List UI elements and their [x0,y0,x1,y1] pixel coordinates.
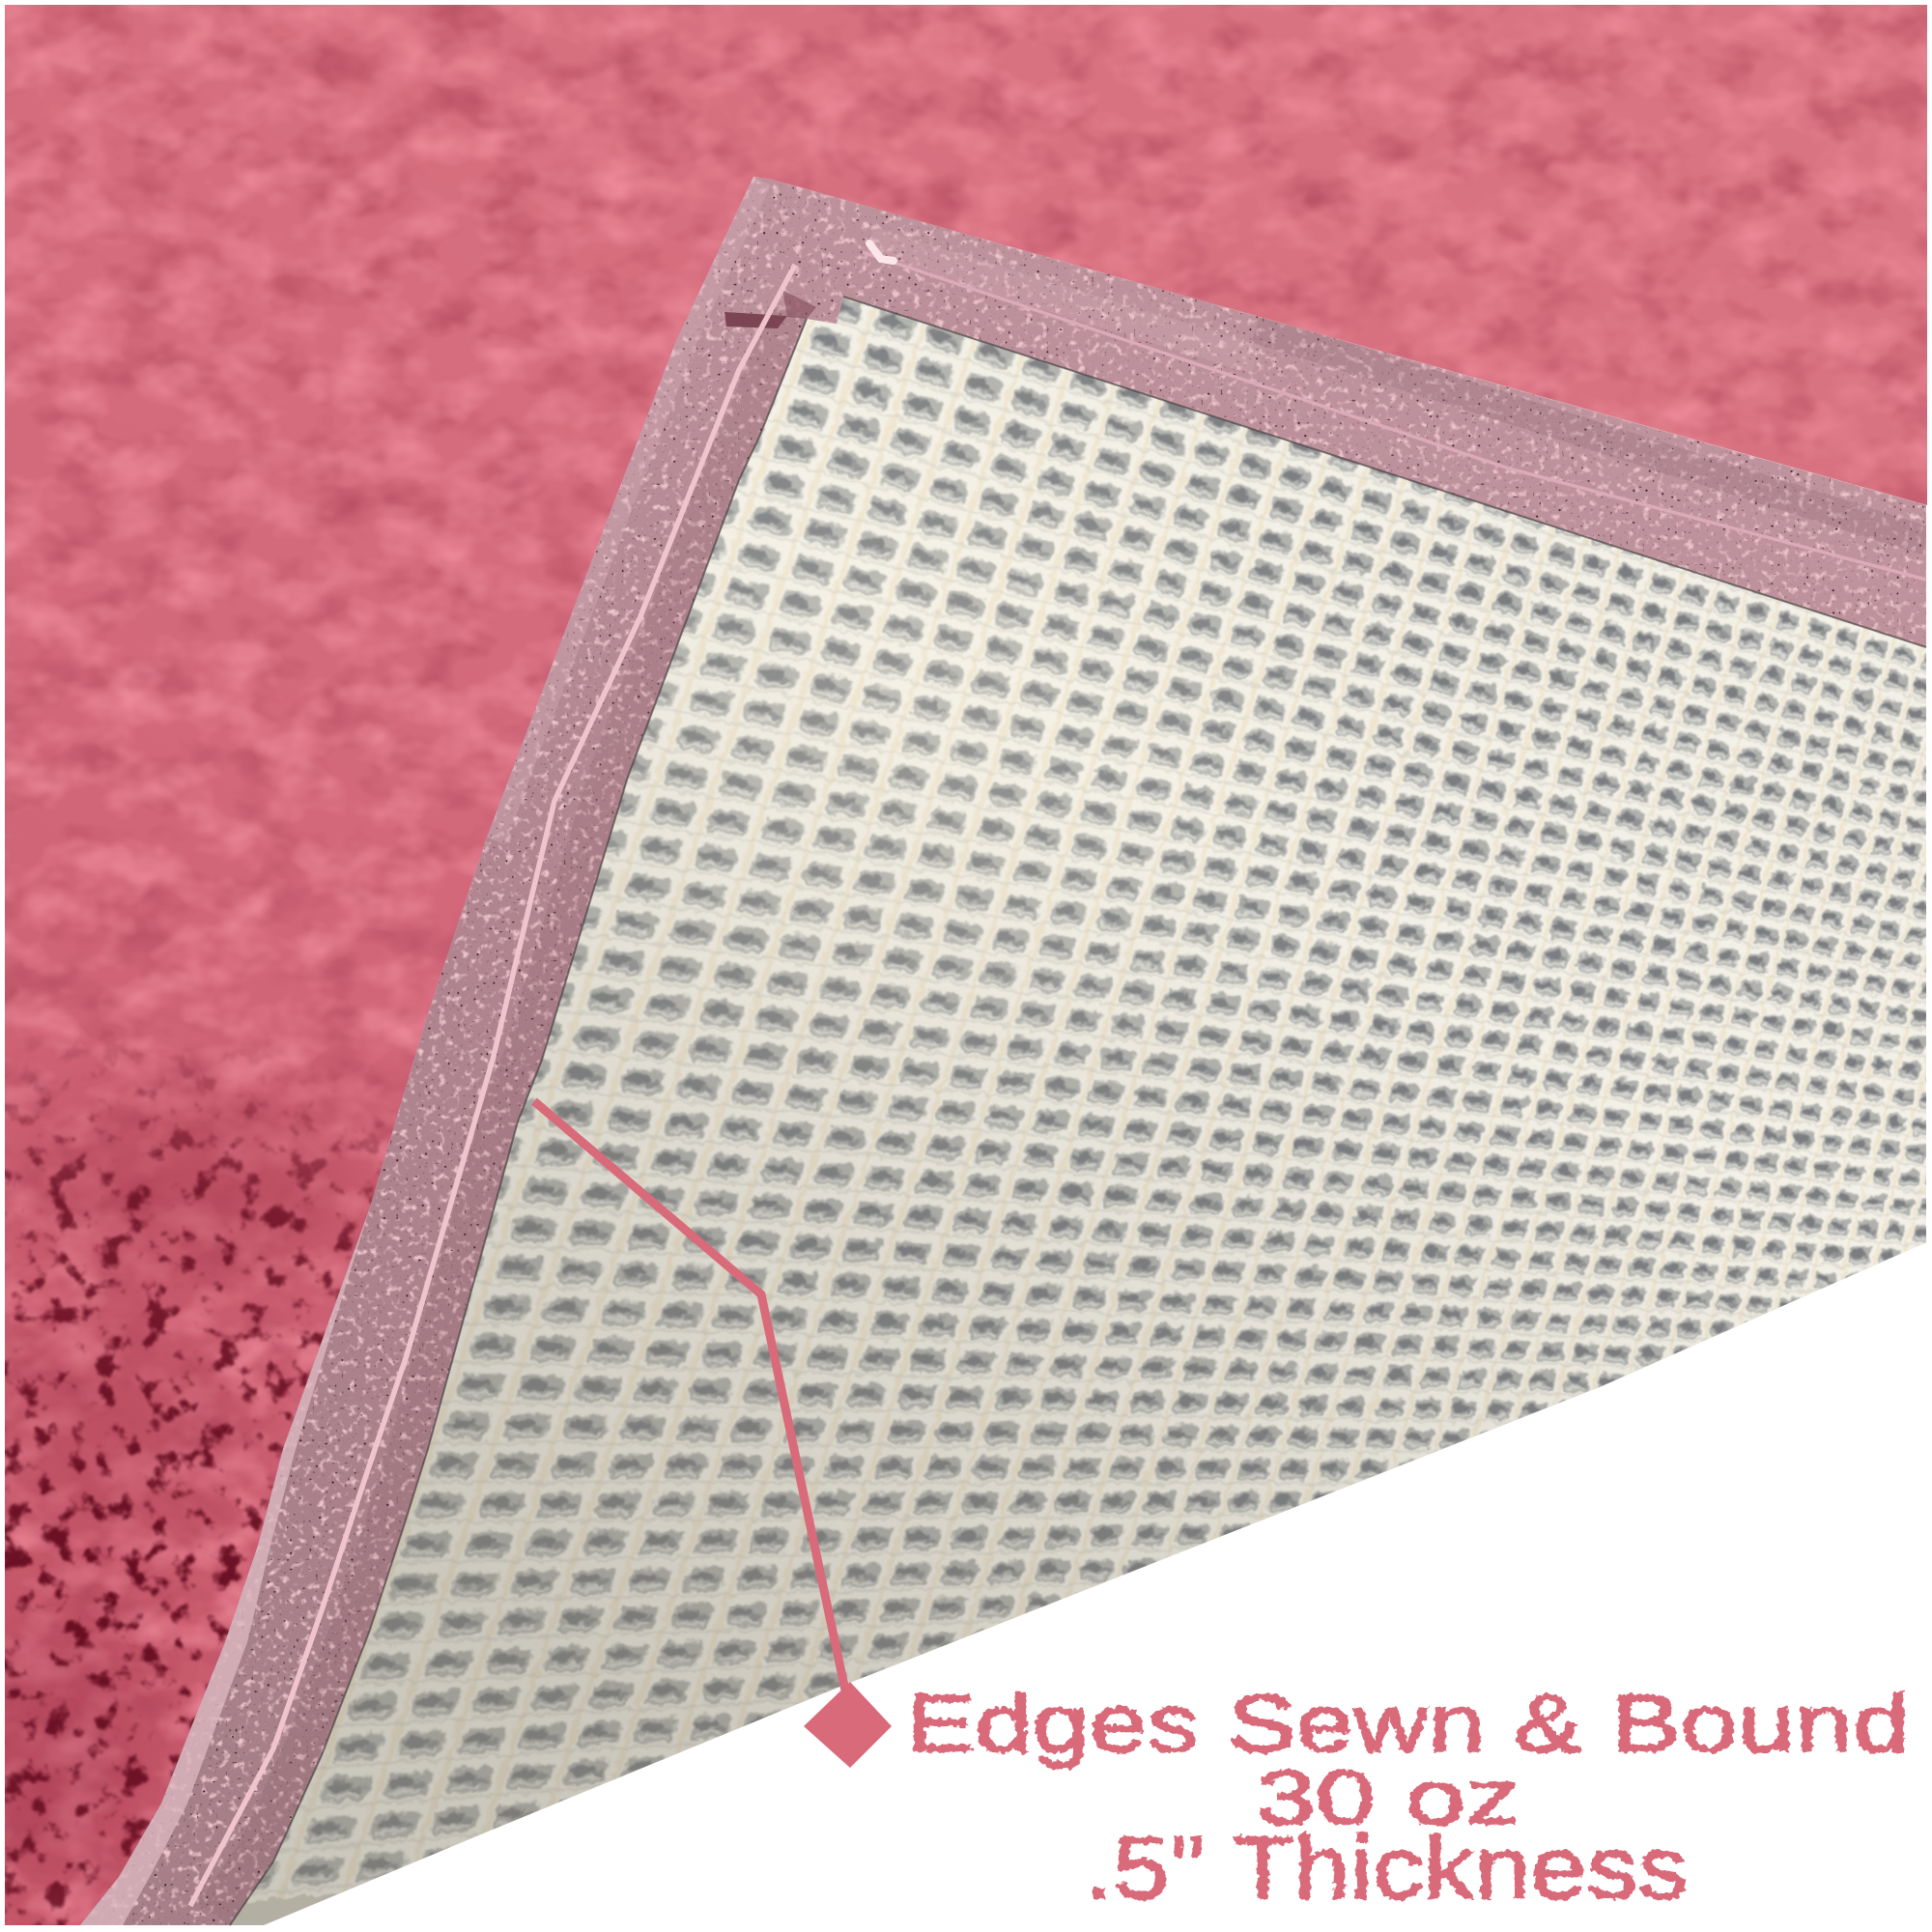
stitch seam: top edge [863,252,1926,580]
corner stitching highlight [869,243,894,261]
callout text: Edges Sewn & Bound [906,1678,1910,1769]
backing edge shadow [230,297,1926,1925]
callout text [906,1678,1910,1918]
callout text: 30 oz [1256,1754,1520,1840]
stitch seam: left edge [190,265,795,1906]
callout leader line and diamond [534,1101,892,1768]
panel: woven rug backing [230,297,1926,1925]
callout text: .5" Thickness [1085,1819,1689,1918]
